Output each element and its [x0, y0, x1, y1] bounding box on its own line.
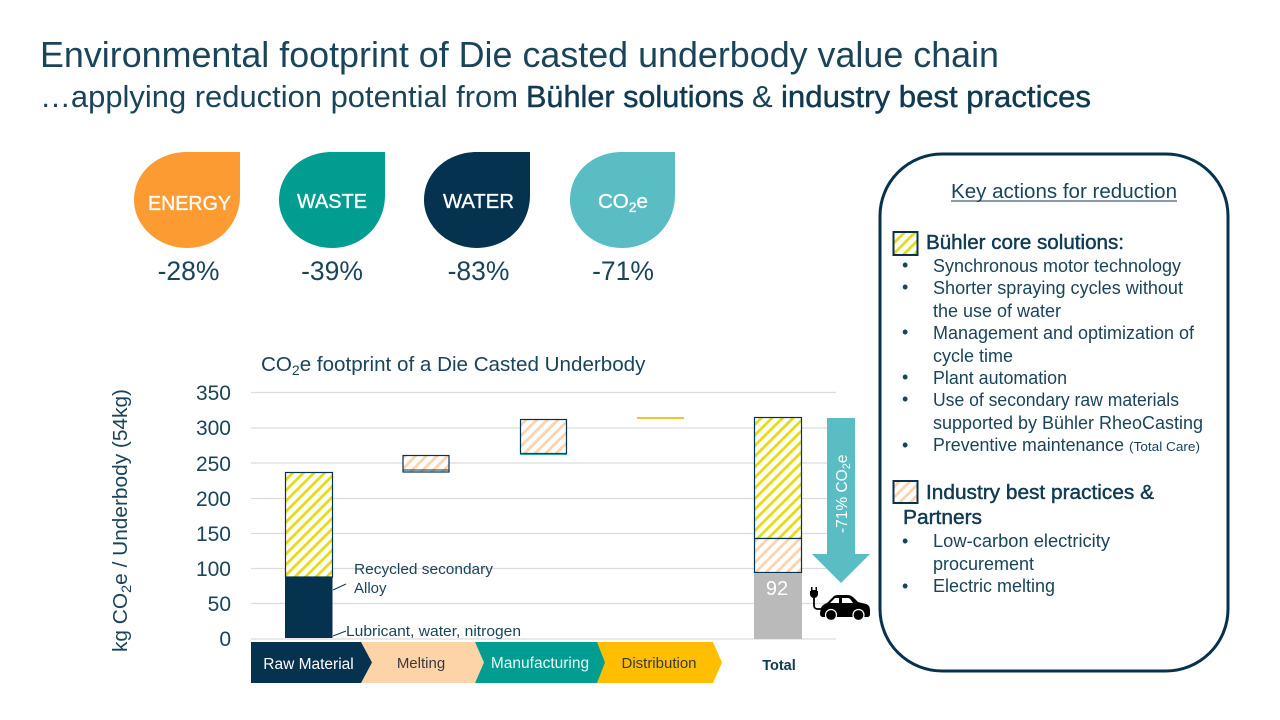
list: Bühler core solutions: supported by Bühler RheoCasting: [933, 413, 1203, 433]
KPI: CO2e: CO: [598, 190, 629, 213]
bar: total: [754, 418, 802, 639]
legend: industry best practices: Industry best practices &: [926, 482, 1155, 504]
list: Bühler core solutions: Management and optimization of: [933, 323, 1195, 343]
list: Bühler core solutions: Synchronous motor technology: [933, 256, 1181, 276]
list: Bühler core solutions: Plant automation: [933, 368, 1067, 388]
list: Bühler core solutions: cycle time: [933, 346, 1013, 366]
list: Bühler core solutions: •: [902, 389, 908, 409]
y axis title: 2: [118, 585, 134, 593]
list: Bühler core solutions: Shorter spraying cycles without: [933, 278, 1183, 298]
list: Bühler core solutions: •: [902, 255, 908, 275]
chart heading: 2: [292, 362, 300, 378]
bar: melting: [403, 456, 449, 472]
KPI: energy: [134, 152, 240, 286]
title: &: [752, 79, 773, 114]
KPI: CO2e: -71%: [592, 256, 654, 286]
KPI: CO2e: 2: [629, 199, 637, 215]
annotation: recycled secondary alloy: Recycled secondary: [354, 561, 494, 578]
list: industry best practices: •: [902, 531, 908, 551]
arrow: -71% CO2e: 2: [841, 463, 853, 469]
list: industry best practices: Low-carbon electricity: [933, 531, 1110, 551]
y axis labels: 0: [219, 628, 231, 651]
y axis labels: 350: [196, 382, 231, 405]
annotation: recycled secondary alloy: [333, 561, 494, 597]
stage: distribution: [592, 642, 722, 683]
title: …applying reduction potential from: [40, 79, 518, 114]
legend: industry best practices: Partners: [903, 507, 982, 529]
list: Bühler core solutions: •: [902, 322, 908, 342]
KPI: waste: WASTE: [297, 190, 367, 213]
y axis labels: 250: [196, 453, 231, 476]
stage: melting: [361, 642, 484, 683]
y axis labels: [196, 382, 231, 651]
KPI: waste: -39%: [301, 256, 363, 286]
y axis title: kg CO: [110, 595, 132, 652]
list: industry best practices: Electric melting: [933, 576, 1055, 596]
KPI: waste: [279, 152, 385, 286]
KPI: CO2e: e: [637, 190, 648, 213]
stage: raw material: [251, 642, 372, 683]
y axis labels: 100: [196, 558, 231, 581]
list: Bühler core solutions: •: [902, 435, 908, 455]
arrow: -71% CO2e: -71% CO: [834, 469, 851, 533]
legend: industry best practices: [894, 481, 1155, 529]
value chain stages: [251, 642, 722, 683]
panel: key actions: [880, 154, 1228, 671]
y axis labels: 150: [196, 523, 231, 546]
list: Bühler core solutions: (Total Care): [1129, 439, 1200, 454]
KPI: CO2e: [570, 152, 675, 286]
title: Environmental footprint of Die casted underbody value chain: [40, 34, 999, 75]
bar: distribution: [637, 417, 684, 419]
list: industry best practices: •: [902, 576, 908, 596]
stage: raw material: Raw Material: [263, 656, 354, 673]
stage: manufacturing: [475, 642, 605, 683]
list: Bühler core solutions: the use of water: [933, 301, 1061, 321]
list: Bühler core solutions: Preventive maintenance: [933, 435, 1124, 455]
list: industry best practices: procurement: [933, 554, 1034, 574]
arrow: -71% CO2e: [812, 418, 870, 583]
panel heading: Key actions for reduction: [951, 181, 1177, 203]
list: Bühler core solutions: •: [902, 367, 908, 387]
arrow: -71% CO2e: e: [834, 454, 851, 463]
list: Bühler core solutions: [902, 255, 1203, 455]
list: Bühler core solutions: •: [902, 277, 908, 297]
chart heading: e footprint of a Die Casted Underbody: [300, 353, 646, 376]
bar: raw material: [285, 472, 332, 638]
KPI: water: WATER: [443, 190, 514, 213]
KPI: energy: ENERGY: [148, 192, 231, 215]
list: Bühler core solutions: Use of secondary raw materials: [933, 390, 1179, 410]
list: industry best practices: [902, 531, 1110, 596]
y axis title: e / Underbody (54kg): [110, 389, 132, 585]
total label: Total: [762, 658, 796, 674]
y axis labels: 200: [196, 488, 231, 511]
stage: melting: Melting: [397, 655, 445, 672]
annotation: recycled secondary alloy: Alloy: [354, 580, 387, 597]
stage: distribution: Distribution: [621, 655, 697, 672]
y axis labels: 50: [208, 593, 231, 616]
icon: electric car: [810, 587, 870, 620]
KPI: energy: -28%: [158, 256, 219, 286]
title: industry best practices: [781, 79, 1091, 114]
bar: manufacturing: [520, 420, 567, 454]
chart heading: CO: [261, 353, 292, 376]
stage: manufacturing: Manufacturing: [491, 655, 589, 672]
y axis labels: 300: [196, 417, 231, 440]
title: Bühler solutions: [526, 79, 744, 114]
KPI: water: [424, 152, 530, 286]
title: [40, 34, 1091, 114]
bar: total: 92: [766, 578, 788, 600]
legend: Bühler core solutions: Bühler core solutions:: [926, 232, 1124, 254]
KPI: water: -83%: [448, 256, 509, 286]
annotation: lubricant, water, nitrogen: Lubricant, water, nitrogen: [346, 623, 521, 640]
